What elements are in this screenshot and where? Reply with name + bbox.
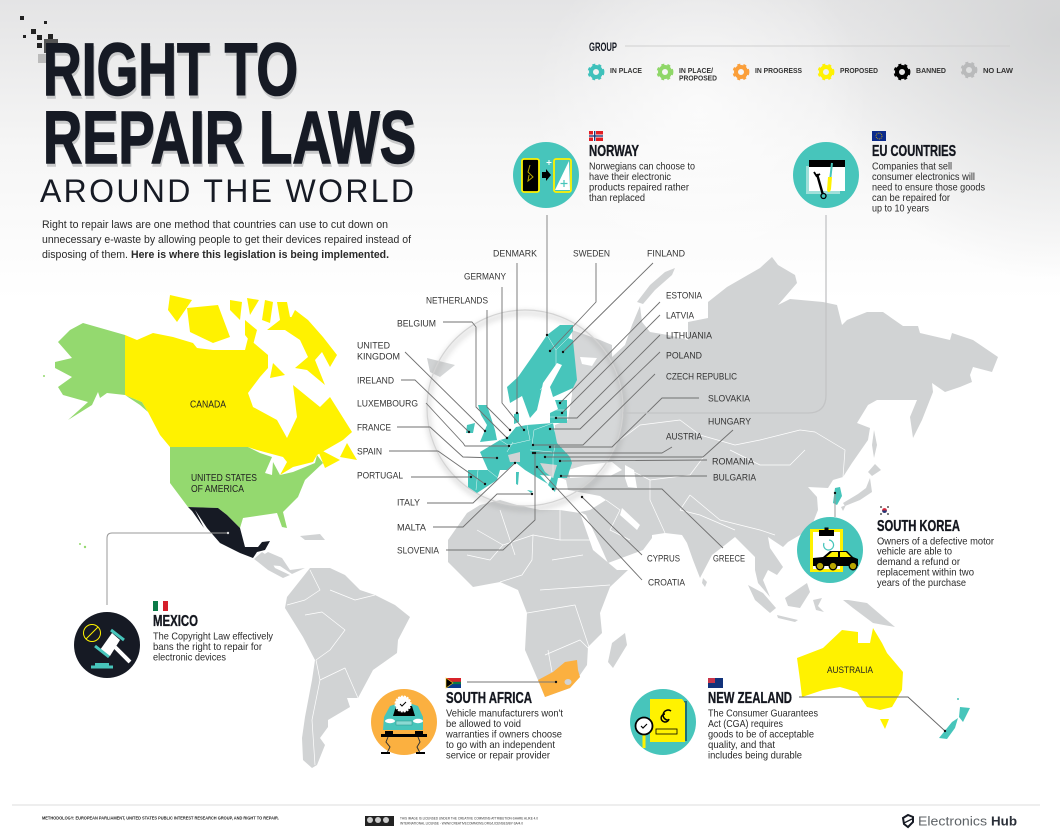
intro text: disposing of them. xyxy=(42,249,128,261)
title: RIGHT TO xyxy=(44,31,299,114)
title: RIGHT TO xyxy=(43,28,298,111)
eu country labels: CYPRUS xyxy=(647,552,680,564)
text: south africa xyxy=(445,708,563,762)
logo: electronics hub: Hub xyxy=(991,814,1017,828)
eu country labels: ITALY xyxy=(397,496,421,508)
text: new zealand: quality, and that xyxy=(708,740,775,751)
intro text: Here is where this legislation is being implemented. xyxy=(131,249,389,261)
eu country labels: DENMARK xyxy=(493,248,538,258)
methodology: METHODOLOGY: EUROPEAN PARLIAMENT, UNITED STATES PUBLIC INTEREST RESEARCH GROUP, AND RIGHT TO REPAIR. xyxy=(42,816,279,822)
callout: norway xyxy=(513,131,695,336)
title: REPAIR LAWS xyxy=(44,99,417,182)
no-law land xyxy=(258,257,998,768)
text: south africa: to go with an independent xyxy=(446,740,555,751)
eu country labels: FINLAND xyxy=(647,248,685,258)
eu leader xyxy=(623,215,826,413)
text: eu: Companies that sell xyxy=(872,162,952,172)
norway leader xyxy=(546,215,548,336)
text: south africa: Vehicle manufacturers won't xyxy=(446,708,563,720)
magnifier circle xyxy=(427,310,624,509)
logo: electronics hub: Electronics xyxy=(918,814,988,828)
text: mexico: electronic devices xyxy=(153,652,226,664)
label: usa: OF AMERICA xyxy=(191,484,244,495)
text: eu: need to ensure those goods xyxy=(872,182,985,194)
text: eu xyxy=(872,162,985,214)
south africa: in progress xyxy=(538,660,580,697)
eu country labels: LUXEMBOURG xyxy=(357,398,418,408)
eu country labels: FRANCE xyxy=(357,422,391,432)
europe borders and enclaves xyxy=(476,335,568,490)
intro text xyxy=(42,219,412,261)
text: norway xyxy=(589,162,695,204)
heading: south africa: SOUTH AFRICA xyxy=(446,690,532,707)
license text: INTERNATIONAL LICENSE - WWW.CREATIVECOMMONS.ORG/LICENSES/BY-SA/4.0 xyxy=(400,820,524,826)
icon: gavel xyxy=(74,612,140,678)
eu country labels: SWEDEN xyxy=(573,248,610,258)
heading: south korea: SOUTH KOREA xyxy=(877,518,960,535)
label: usa xyxy=(191,473,257,495)
eu country labels: PORTUGAL xyxy=(357,470,403,480)
callout: south africa xyxy=(371,678,563,762)
alaska and usa: in place/proposed xyxy=(43,323,323,548)
flag: new zealand xyxy=(708,678,723,688)
inland seas xyxy=(568,357,640,530)
flag: norway xyxy=(589,131,603,141)
legend xyxy=(589,40,1013,82)
text: norway: products repaired rather xyxy=(589,182,689,194)
eu country labels: IRELAND xyxy=(357,374,394,386)
legend: no law xyxy=(962,63,1013,77)
label: usa: UNITED STATES xyxy=(191,473,257,484)
text: eu: up to 10 years xyxy=(872,204,929,214)
callout: mexico xyxy=(74,532,274,678)
text: south korea: vehicle are able to xyxy=(877,546,952,558)
license text xyxy=(400,816,539,826)
eu country labels: KINGDOM xyxy=(357,350,400,362)
title xyxy=(43,28,417,182)
flag: south africa xyxy=(446,678,461,688)
legend: in progress: IN PROGRESS xyxy=(755,66,802,75)
legend: in place/proposed: PROPOSED xyxy=(679,74,718,82)
eu country labels: SLOVENIA xyxy=(397,544,440,556)
flag: eu xyxy=(872,131,886,141)
eu country labels: AUSTRIA xyxy=(666,430,703,442)
footer xyxy=(12,805,1040,828)
text: eu: consumer electronics will xyxy=(872,172,975,183)
eu country labels: GREECE xyxy=(713,552,745,564)
page background xyxy=(0,0,1060,300)
eu country labels: UNITED xyxy=(357,340,390,350)
license badge xyxy=(365,816,394,826)
south africa leader xyxy=(467,681,557,683)
text: new zealand: The Consumer Guarantees xyxy=(708,708,818,720)
text: mexico: The Copyright Law effectively xyxy=(153,632,274,642)
text: south korea: Owners of a defective motor xyxy=(877,536,994,548)
title: REPAIR LAWS xyxy=(43,96,416,179)
pixel decoration xyxy=(20,16,58,63)
eu country labels: NETHERLANDS xyxy=(426,294,488,306)
canada: proposed xyxy=(125,295,357,475)
text: south africa: warranties if owners choose xyxy=(445,730,562,740)
heading: eu: EU COUNTRIES xyxy=(872,143,956,160)
eu country labels: MALTA xyxy=(397,522,427,532)
callout: south korea xyxy=(797,492,994,589)
text: south korea: years of the purchase xyxy=(877,578,966,589)
eu country labels: BELGIUM xyxy=(397,318,436,328)
eu country labels: LATVIA xyxy=(666,310,695,320)
flag: south korea xyxy=(879,506,890,515)
legend: in place/proposed xyxy=(658,65,718,82)
text: south korea xyxy=(877,536,994,589)
eu country labels: HUNGARY xyxy=(708,416,752,426)
icon: clipboard and car xyxy=(797,517,863,583)
eu country labels: ESTONIA xyxy=(666,290,703,300)
intro text: unnecessary e-waste by allowing people to get their devices repaired instead of xyxy=(42,234,412,246)
text: norway: Norwegians can choose to xyxy=(589,162,695,172)
south korea leader xyxy=(834,492,836,517)
eu country labels: ROMANIA xyxy=(712,456,755,466)
label: canada: CANADA xyxy=(190,400,226,410)
eu country labels: POLAND xyxy=(666,350,702,360)
map labels xyxy=(190,400,874,676)
intro text: Right to repair laws are one method that countries can use to cut down on xyxy=(42,219,388,231)
heading: new zealand: NEW ZEALAND xyxy=(708,690,792,707)
legend heading: GROUP xyxy=(589,40,617,54)
eu country labels: SPAIN xyxy=(357,446,382,456)
text: new zealand: Act (CGA) requires xyxy=(708,719,783,730)
eu country labels: GERMANY xyxy=(464,270,507,282)
eu country labels: CROATIA xyxy=(648,576,686,588)
world map xyxy=(43,257,998,768)
text: norway: have their electronic xyxy=(589,172,671,183)
flag: mexico xyxy=(153,601,168,611)
text: new zealand: includes being durable xyxy=(708,750,802,762)
legend: banned xyxy=(895,65,947,79)
legend: in progress xyxy=(734,65,802,79)
icon: document and magnifier xyxy=(630,689,696,755)
callout: eu countries xyxy=(623,131,985,413)
eu country labels: BULGARIA xyxy=(713,472,757,482)
text: new zealand: goods to be of acceptable xyxy=(708,730,814,740)
legend: no law: NO LAW xyxy=(983,66,1013,75)
heading: mexico: MEXICO xyxy=(153,613,198,630)
eu country labels xyxy=(357,248,757,588)
subtitle: AROUND THE WORLD xyxy=(40,173,414,209)
country borders xyxy=(287,420,845,765)
central america xyxy=(254,552,290,578)
legend: banned: BANNED xyxy=(916,66,947,75)
eu country labels: CZECH REPUBLIC xyxy=(666,370,737,382)
heading: norway: NORWAY xyxy=(589,143,639,160)
mexico: banned xyxy=(188,507,270,558)
australia: proposed xyxy=(797,628,903,729)
mexico leader xyxy=(107,532,229,605)
legend: in place/proposed: IN PLACE/ xyxy=(679,66,713,75)
eu country labels: LITHUANIA xyxy=(666,330,713,340)
legend: in place xyxy=(589,65,642,79)
europe: in place xyxy=(466,325,970,739)
text: mexico: bans the right to repair for xyxy=(153,642,262,653)
license text: THIS IMAGE IS LICENSED UNDER THE CREATIVE COMMONS ATTRIBUTION-SHARE ALIKE 4.0 xyxy=(400,816,539,820)
logo: electronics hub xyxy=(903,814,1017,828)
legend: in place: IN PLACE xyxy=(610,66,642,75)
icon: phones xyxy=(513,142,579,208)
text: mexico xyxy=(153,632,274,664)
text: eu: can be repaired for xyxy=(872,193,950,204)
text: south africa: be allowed to void xyxy=(446,719,521,730)
text: south korea: demand a refund or xyxy=(877,557,960,568)
callout: new zealand xyxy=(630,678,946,762)
label: australia: AUSTRALIA xyxy=(827,665,874,676)
new zealand leader xyxy=(799,697,946,732)
legend: proposed: PROPOSED xyxy=(840,66,879,75)
eu country leaders xyxy=(389,263,733,580)
text: south korea: replacement within two xyxy=(877,568,974,578)
icon: car on lift xyxy=(371,689,437,755)
text: south africa: service or repair provider xyxy=(446,750,550,762)
legend: proposed xyxy=(819,65,879,79)
text: new zealand xyxy=(708,708,818,762)
eu country labels: SLOVAKIA xyxy=(708,392,751,404)
icon: calendar with tools xyxy=(793,142,859,208)
text: norway: than replaced xyxy=(589,193,645,204)
